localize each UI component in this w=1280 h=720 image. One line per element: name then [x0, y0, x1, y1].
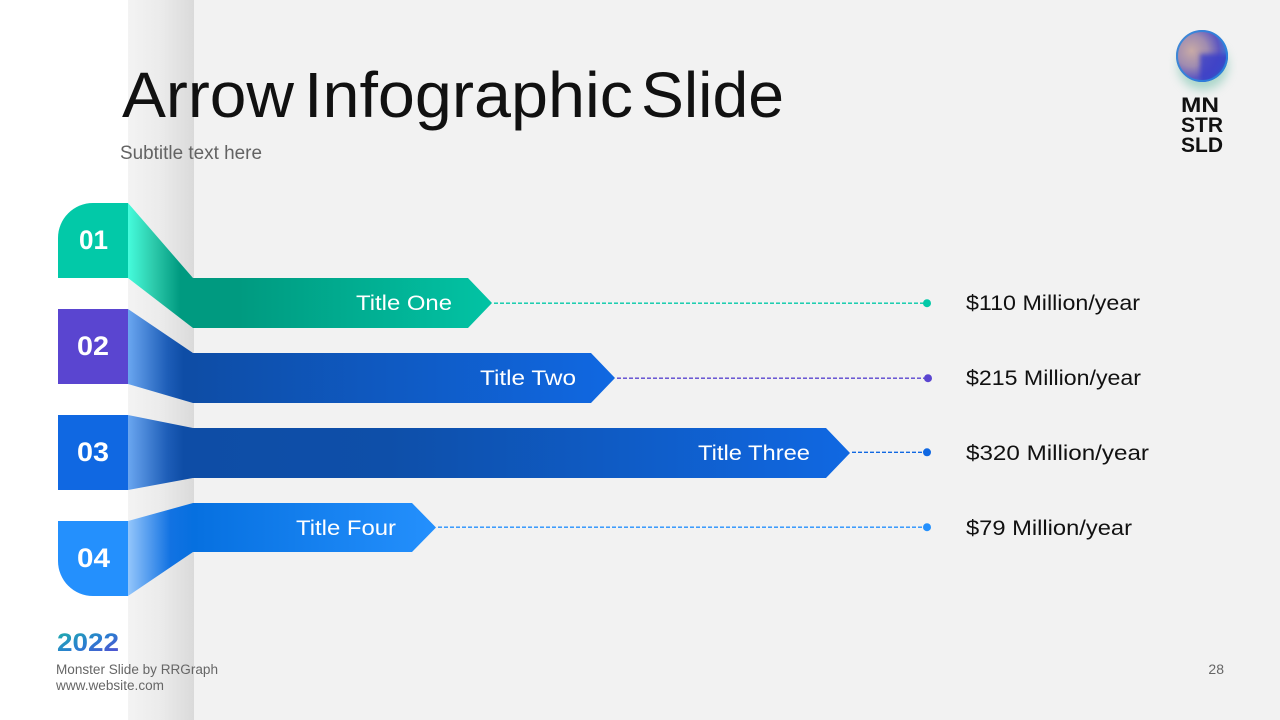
shaded fold band: [128, 0, 194, 720]
year label: 2022: [57, 629, 119, 657]
number tile 03: [58, 415, 128, 490]
fold 4: [128, 503, 193, 596]
leader line 3: [852, 448, 931, 456]
title: Slide: [641, 59, 784, 131]
subtitle: Subtitle text here: [120, 143, 262, 164]
row 2: title two: [58, 309, 1141, 403]
icon: logo sphere: [1176, 30, 1232, 90]
row 4: title four: [58, 503, 1132, 596]
leader line 4: [438, 523, 931, 531]
value 3: $320 Million/year: [966, 442, 1149, 465]
row 1: title one: [58, 203, 1140, 328]
title: Infographic: [304, 59, 633, 131]
title: Arrow: [122, 59, 295, 131]
footer website: www.website.com: [55, 678, 164, 693]
footer credit: Monster Slide by RRGraph: [56, 662, 218, 677]
arrow 4: [193, 503, 436, 552]
logo wordmark: MN: [1181, 93, 1219, 117]
arrow 3: Title Three: [698, 442, 810, 465]
fold 1: [128, 203, 193, 328]
logo wordmark: [1181, 93, 1223, 157]
row 3: title three: [58, 415, 1149, 490]
number tile 03: 03: [77, 437, 109, 467]
logo wordmark: STR: [1181, 113, 1223, 137]
title: [122, 59, 784, 131]
number tile 04: [58, 521, 128, 596]
logo: [1176, 30, 1232, 157]
arrow 3: [193, 428, 850, 478]
number tile 04: 04: [77, 543, 110, 573]
value 4: $79 Million/year: [966, 517, 1132, 540]
arrow 1: [193, 278, 492, 328]
leader line 1: [494, 299, 931, 307]
fold 2: [128, 309, 193, 403]
number tile 01: 01: [79, 225, 108, 255]
leader line 2: [617, 374, 932, 382]
arrow 2: Title Two: [480, 367, 576, 390]
arrow 2: [193, 353, 615, 403]
number tile 02: [58, 309, 128, 384]
value 2: $215 Million/year: [966, 367, 1141, 390]
arrow 1: Title One: [356, 292, 452, 315]
fold 3: [128, 415, 193, 490]
number tile 02: 02: [77, 331, 109, 361]
logo wordmark: SLD: [1181, 133, 1223, 157]
value 1: $110 Million/year: [966, 292, 1140, 315]
page number: 28: [1208, 661, 1224, 677]
white left margin: [0, 0, 128, 720]
number tile 01: [58, 203, 128, 278]
arrow 4: Title Four: [296, 517, 396, 540]
